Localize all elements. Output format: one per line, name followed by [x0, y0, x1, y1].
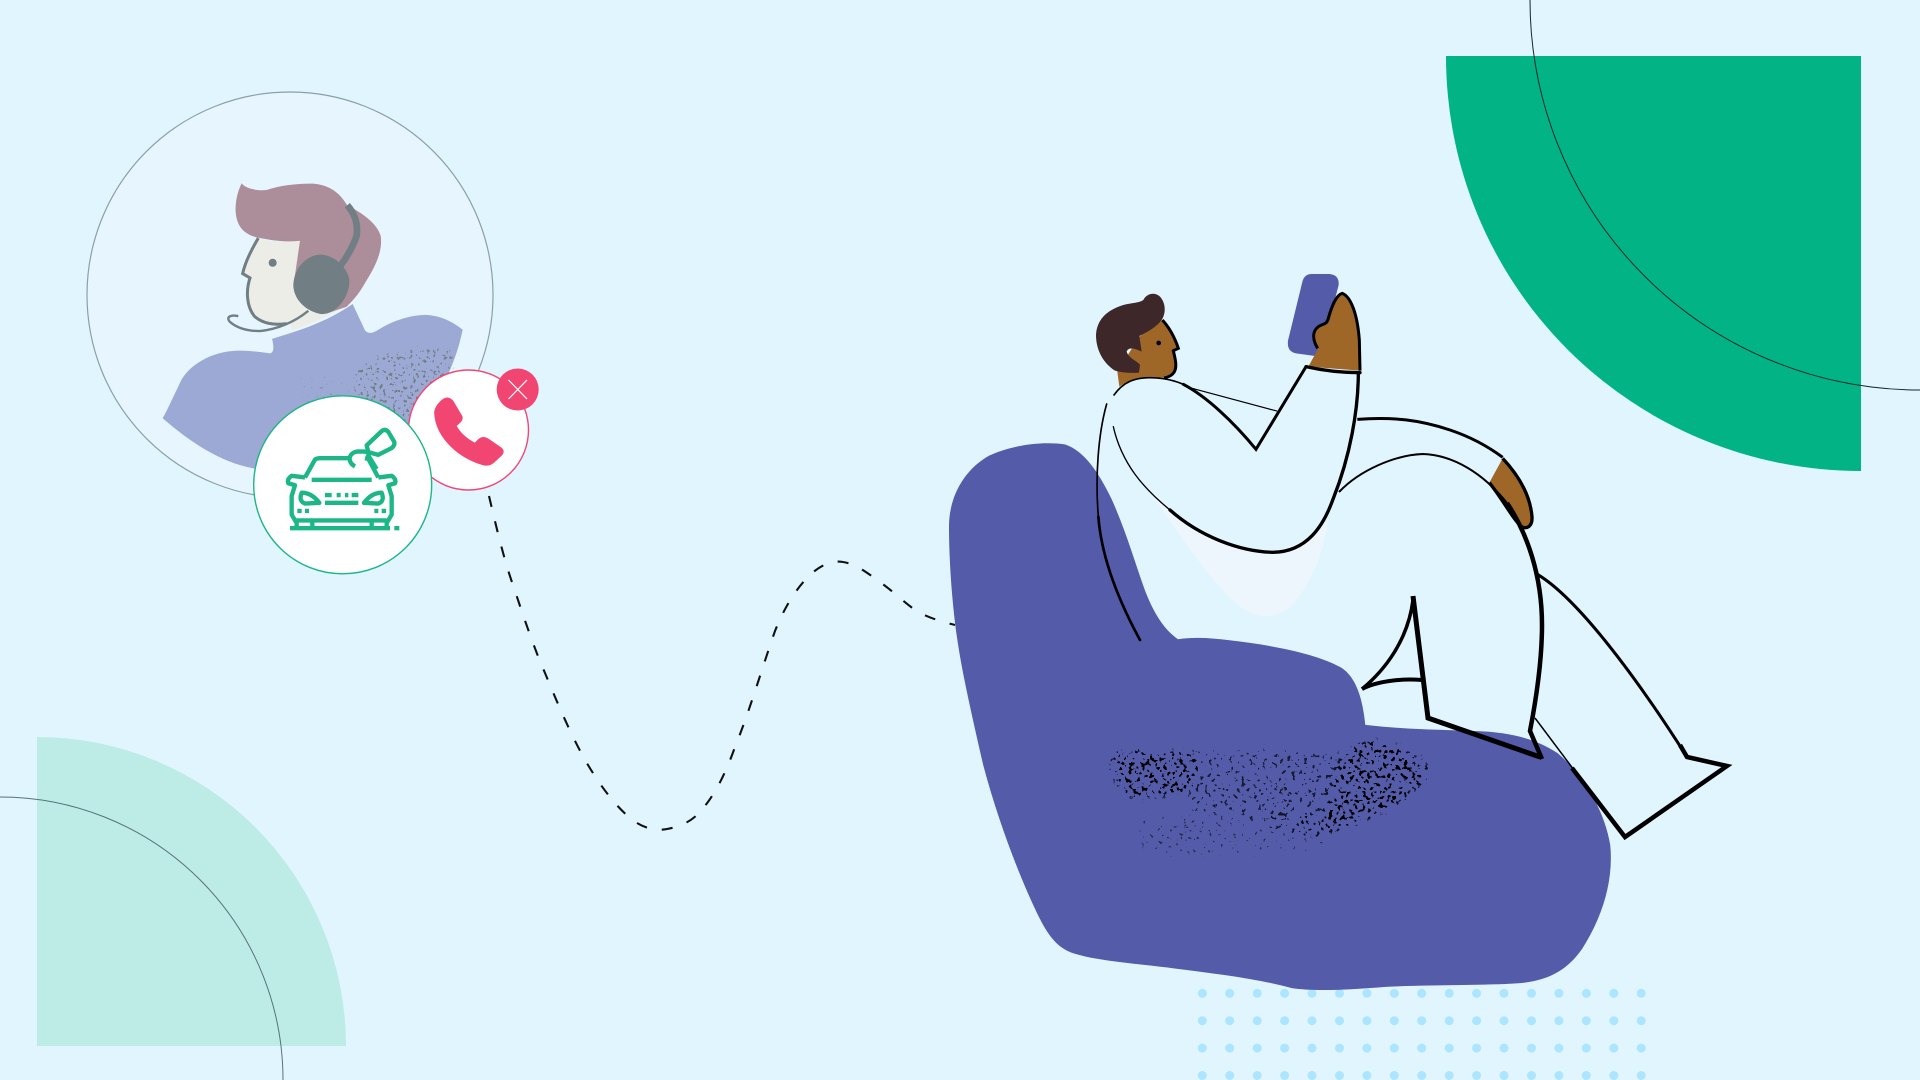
- person: phone: [1288, 274, 1339, 357]
- icon: car with tag: [288, 430, 399, 528]
- person: shirt shadow: [1150, 492, 1328, 616]
- agent: hair: [236, 183, 381, 313]
- phone circle: [408, 370, 528, 490]
- person: torso and arm outlines: [1097, 367, 1360, 640]
- person: raised hand: [1308, 293, 1360, 371]
- car circle: [254, 396, 432, 574]
- agent speckle texture: [288, 347, 453, 425]
- agent: eye: [269, 259, 277, 267]
- person: head: [1096, 294, 1179, 387]
- agent bubble: [87, 92, 493, 498]
- thin arc, top right: [1530, 0, 1920, 390]
- person: legs: [1339, 454, 1727, 837]
- agent: face: [243, 238, 337, 330]
- light green quarter circle, bottom left: [37, 737, 346, 1046]
- agent illustration: [163, 183, 463, 476]
- phone circle with missed call: [408, 368, 539, 490]
- person: forearm and lower hand: [1357, 418, 1533, 528]
- red close badge: [497, 368, 539, 410]
- thin arc, bottom left: [0, 797, 283, 1080]
- chair speckle texture: [1110, 738, 1432, 855]
- chair: [949, 443, 1611, 990]
- dot grid: [1198, 989, 1646, 1080]
- person: [1096, 274, 1727, 837]
- agent: ear cup: [293, 255, 349, 314]
- dashed connector line: [489, 496, 955, 830]
- agent circle: [87, 92, 493, 498]
- green quarter circle, top right: [1446, 56, 1861, 471]
- agent: body: [163, 304, 463, 476]
- phone icon: [435, 398, 503, 465]
- agent: face outline and mic: [228, 205, 357, 331]
